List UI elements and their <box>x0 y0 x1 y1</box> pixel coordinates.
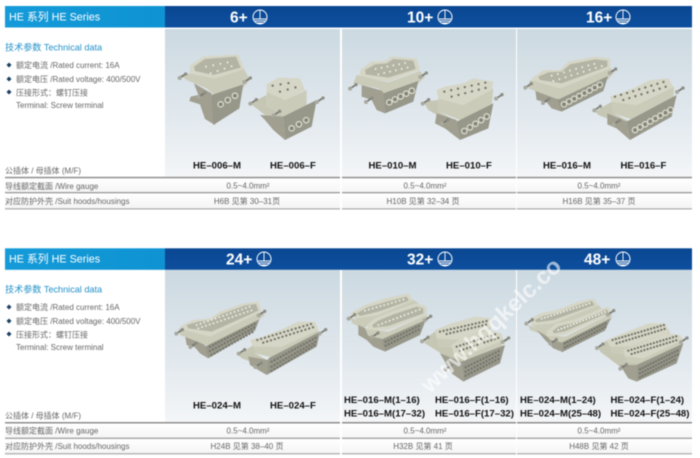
spec rows: 导线额定截面 /Wire gauge <box>5 426 99 436</box>
spec rows <box>5 29 692 210</box>
model labels: HE–024–M <box>193 400 241 412</box>
model labels: HE–016–M(1–16) <box>344 395 420 406</box>
spec rows: 0.5~4.0mm² <box>227 426 270 436</box>
connectors 24 <box>174 302 327 375</box>
spec rows: 公插体 / 母插体 (M/F) <box>5 410 81 420</box>
model labels <box>193 395 689 420</box>
spec rows: H32B 见第 41 页 <box>393 441 453 451</box>
model labels: HE–006–M <box>193 160 241 172</box>
model labels: HE–016–F(1–16) <box>435 395 509 406</box>
product panels <box>165 270 692 422</box>
connectors 16 <box>523 57 685 140</box>
spec rows: 对应防护外壳 /Suit hoods/housings <box>5 441 130 451</box>
product panels <box>165 29 692 177</box>
spec rows: H48B 见第 42 页 <box>569 441 629 451</box>
model labels: HE–024–M(1–24) <box>520 395 596 406</box>
section: bottom table 24+ 32+ 48+ <box>5 248 692 455</box>
model labels: HE–010–M <box>368 160 417 172</box>
spec rows: H24B 见第 38–40 页 <box>211 441 283 451</box>
spec rows: 0.5~4.0mm² <box>404 426 447 436</box>
model labels: HE–024–F(1–24) <box>610 395 684 406</box>
spec rows: H10B 见第 32–34 页 <box>387 196 459 206</box>
heading: 24+: 24+ <box>226 252 252 268</box>
spec rows: 0.5~4.0mm² <box>578 182 621 190</box>
model labels <box>193 160 667 172</box>
heading: 24+ <box>226 252 271 268</box>
spec rows: 0.5~4.0mm² <box>404 182 447 190</box>
connectors 10 <box>348 57 504 140</box>
model labels: HE–024–F(25–48) <box>610 408 689 420</box>
model labels: HE–016–F(17–32) <box>435 408 514 420</box>
heading: 6+ <box>230 10 267 26</box>
header band <box>5 6 692 28</box>
connectors 32 <box>347 293 510 382</box>
heading: 16+ <box>586 10 630 26</box>
heading: 6+: 6+ <box>230 10 248 26</box>
connectors 6 <box>178 54 325 140</box>
technical data block <box>5 252 141 352</box>
heading: 48+: 48+ <box>584 252 610 268</box>
spec rows: 公插体 / 母插体 (M/F) <box>5 166 81 176</box>
spec rows: H6B 见第 30–31页 <box>214 196 280 206</box>
heading: 32+: 32+ <box>407 252 433 268</box>
heading: 32+ <box>407 252 452 268</box>
watermark: www.hqqkelc.co <box>415 253 566 398</box>
model labels: HE–024–M(25–48) <box>520 408 601 420</box>
heading: 10+: 10+ <box>407 10 433 26</box>
spec rows: 0.5~4.0mm² <box>578 426 621 436</box>
technical data block <box>5 10 141 110</box>
connectors 48 <box>524 298 689 382</box>
heading: 16+: 16+ <box>586 10 612 26</box>
spec rows: 0.5~4.0mm² <box>227 182 270 190</box>
heading: 48+ <box>584 252 630 268</box>
model labels: HE–006–F <box>270 160 316 172</box>
model labels: HE–016–F <box>620 160 667 172</box>
spec rows: 对应防护外壳 /Suit hoods/housings <box>5 196 130 206</box>
header band <box>5 248 692 270</box>
spec rows: 导线额定截面 /Wire gauge <box>5 181 99 191</box>
model labels: HE–024–F <box>270 400 316 412</box>
section: top table 6+ 10+ 16+ <box>5 6 692 210</box>
model labels: HE–016–M <box>543 160 591 172</box>
spec rows <box>5 270 692 455</box>
model labels: HE–010–F <box>446 160 492 172</box>
model labels: HE–016–M(17–32) <box>344 408 425 420</box>
spec rows: H16B 见第 35–37 页 <box>563 196 635 206</box>
heading: 10+ <box>407 10 452 26</box>
